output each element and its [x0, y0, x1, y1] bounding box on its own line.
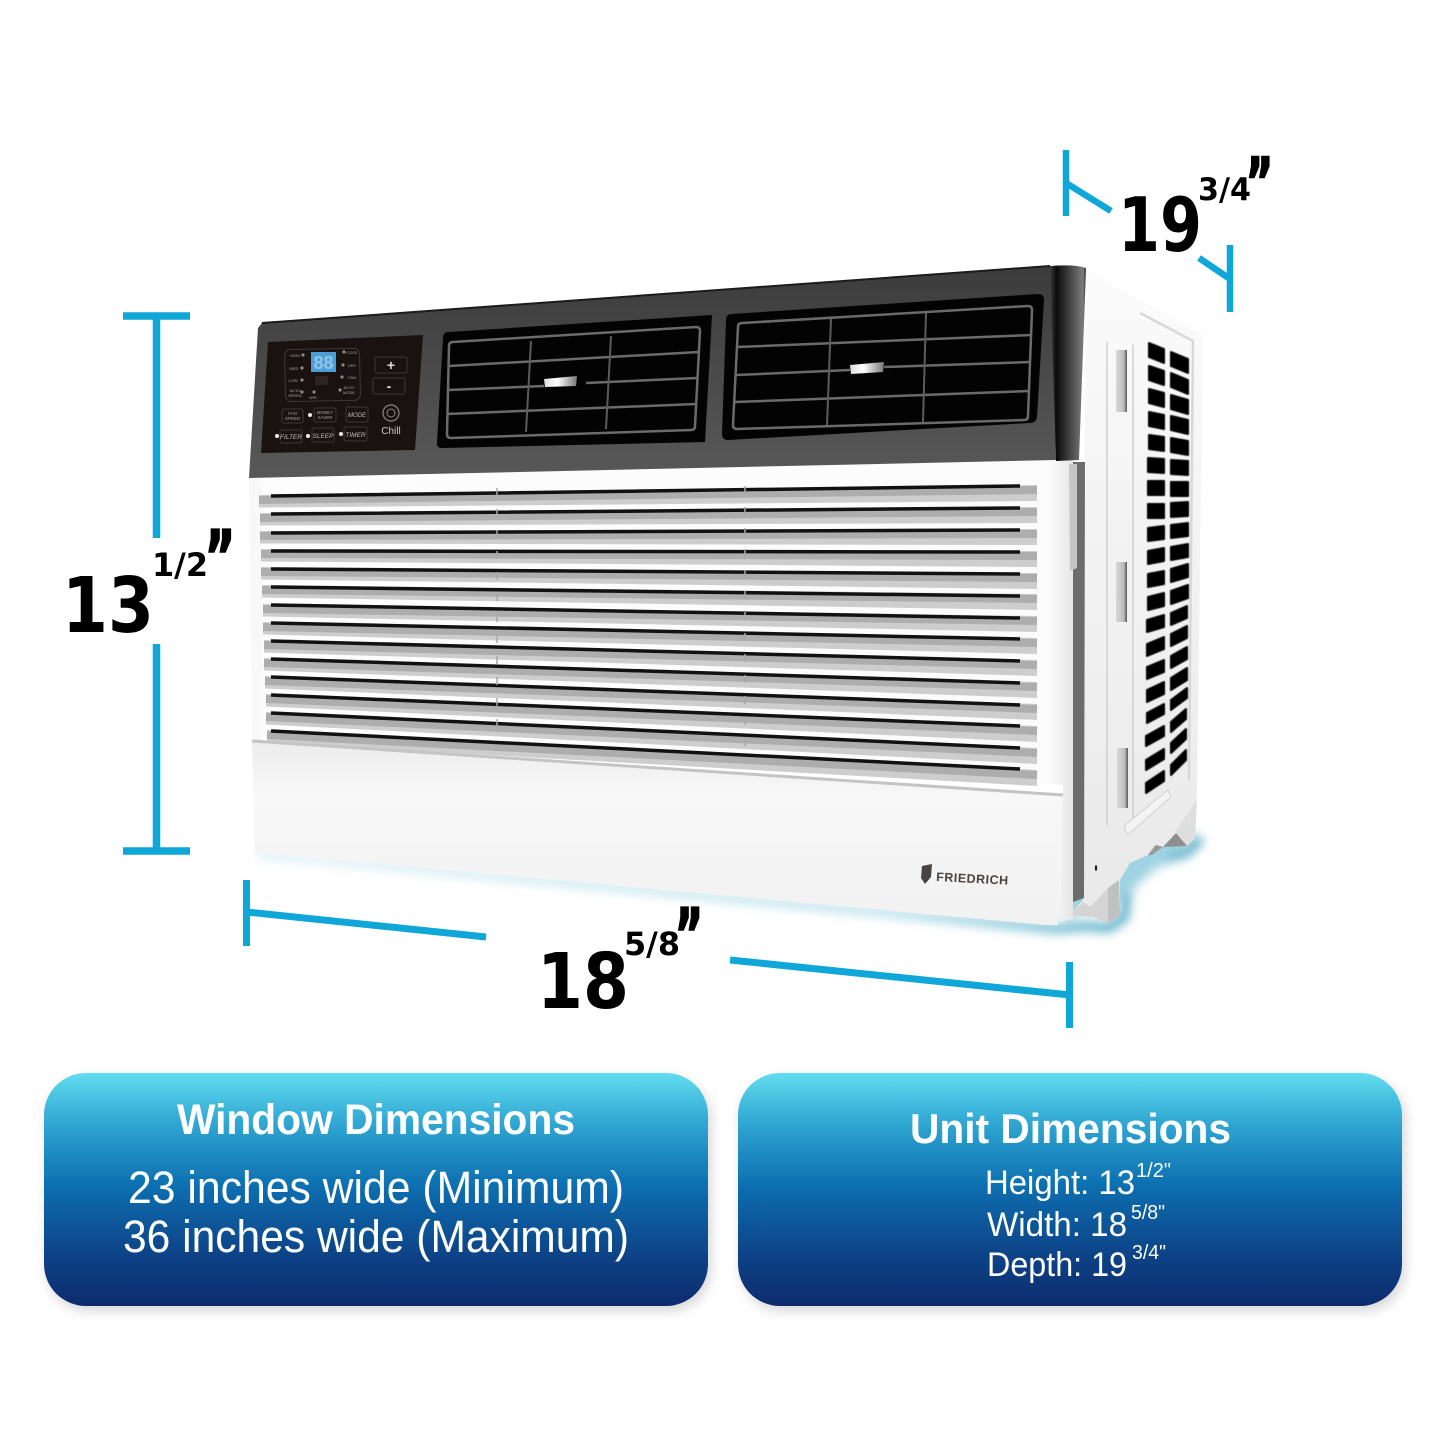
function buttons: TIMER [345, 432, 366, 439]
control panel [261, 335, 423, 453]
mode indicators [288, 350, 358, 400]
small screw hole [1095, 865, 1097, 871]
function buttons: SPEED [285, 416, 301, 421]
mode indicators: SPEED [288, 393, 302, 398]
heading: Window Dimensions [177, 1096, 575, 1144]
dimension: depth [1066, 146, 1273, 312]
depth arrow bars [1066, 150, 1230, 312]
dimension: width [246, 880, 1070, 1028]
width value [537, 894, 703, 1027]
function buttons: MODE [348, 413, 367, 419]
width value: 18 [537, 938, 629, 1027]
width arrow bars [246, 880, 1070, 1028]
gray corner strip [1073, 462, 1085, 902]
power and brand: Chill [381, 426, 401, 437]
lower handle [1125, 790, 1171, 834]
side handles [1116, 350, 1128, 808]
plus and minus buttons: + [387, 357, 395, 373]
power and brand [381, 405, 401, 437]
side vent slots [1146, 343, 1188, 793]
digital display: 88 [313, 353, 334, 373]
depth line: Depth: 19 [987, 1246, 1127, 1284]
depth value [1118, 146, 1273, 269]
plus and minus buttons: - [387, 378, 392, 394]
height value: 1/2 [152, 546, 208, 584]
blue floor glow [258, 800, 1201, 929]
feet [1070, 800, 1197, 923]
function buttons [275, 407, 368, 443]
mode indicators: COOL [346, 350, 358, 355]
side panel [1070, 270, 1203, 923]
mode indicators: MED [290, 366, 299, 371]
function buttons: FAN [288, 411, 297, 416]
height value: ” [205, 516, 235, 598]
height arrow bars [123, 316, 190, 851]
width value: 5/8 [624, 925, 680, 963]
depth value: 19 [1118, 181, 1202, 269]
depth line: 3/4" [1132, 1242, 1166, 1264]
height line: Height: 13 [985, 1164, 1135, 1202]
mode indicators: MODE [343, 390, 355, 395]
right air vent [722, 294, 1044, 440]
mode indicators: LOW [288, 378, 298, 383]
window dimensions text [123, 1162, 629, 1262]
dimension: height [62, 316, 235, 851]
air conditioner unit [249, 265, 1203, 929]
mode indicators: AUTO [343, 385, 355, 390]
heading: Unit Dimensions [910, 1105, 1231, 1152]
height value [62, 516, 235, 651]
function buttons: SLEEP [313, 433, 334, 440]
panel: window dimensions [44, 1073, 708, 1306]
width line: 5/8" [1131, 1202, 1165, 1224]
mode indicators: FAN [348, 375, 356, 380]
function buttons: SAVER [318, 415, 333, 420]
mode indicators: WiFi [309, 395, 317, 400]
left air vent [437, 315, 712, 448]
front grille louvers [259, 485, 1037, 786]
dark top band [249, 266, 1056, 478]
depth value: ” [1246, 146, 1273, 220]
window dimensions text: 23 inches wide (Minimum) [128, 1162, 624, 1213]
width value: ” [675, 894, 703, 976]
window dimensions text: 36 inches wide (Maximum) [123, 1211, 629, 1262]
mode indicators: DRY [348, 363, 357, 368]
plus and minus buttons [373, 357, 407, 394]
chrome strip [1069, 464, 1077, 571]
function buttons: FILTER [280, 434, 302, 441]
function buttons: MONEY [317, 410, 333, 415]
depth value: 3/4 [1198, 172, 1251, 208]
height value: 13 [62, 562, 154, 651]
width line: Width: 18 [987, 1206, 1127, 1244]
FRIEDRICH logo: FRIEDRICH [936, 870, 1008, 888]
height line: 1/2" [1136, 1160, 1171, 1182]
FRIEDRICH logo [921, 864, 1008, 888]
lower front panel [252, 741, 1063, 925]
panel: unit dimensions [738, 1073, 1402, 1306]
mode indicators: HIGH [290, 353, 300, 358]
display frame [285, 348, 360, 402]
white front cover [249, 460, 1073, 923]
mode indicators: AUTO [289, 388, 301, 393]
